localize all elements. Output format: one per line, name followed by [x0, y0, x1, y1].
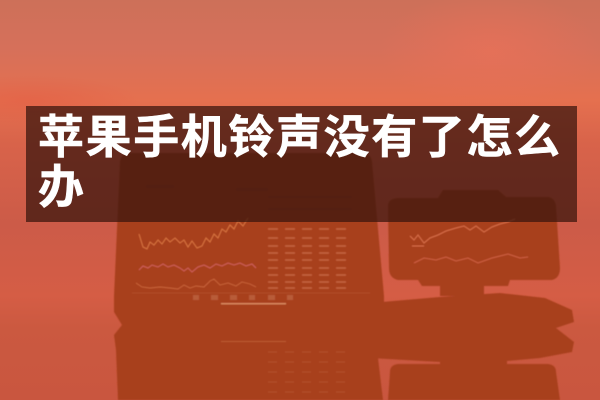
chart: middle line — [139, 263, 256, 272]
large monitor — [114, 153, 384, 400]
right desk object — [370, 293, 574, 372]
data table rows — [268, 229, 352, 288]
reflected small monitor — [388, 358, 560, 400]
chart: lower line — [136, 279, 256, 289]
chart: upper price line — [139, 218, 248, 249]
small monitor — [388, 190, 560, 296]
tab bar underline — [221, 303, 286, 304]
reflected table rows — [268, 352, 352, 392]
small monitor chart lines — [410, 219, 515, 243]
title banner — [26, 106, 577, 222]
title: 苹果手机铃声没有了怎么办 — [38, 111, 562, 213]
reflected tab underline — [221, 341, 286, 342]
monitor header text — [146, 185, 352, 210]
chart separator — [132, 292, 370, 294]
tab bar icons — [193, 295, 293, 300]
